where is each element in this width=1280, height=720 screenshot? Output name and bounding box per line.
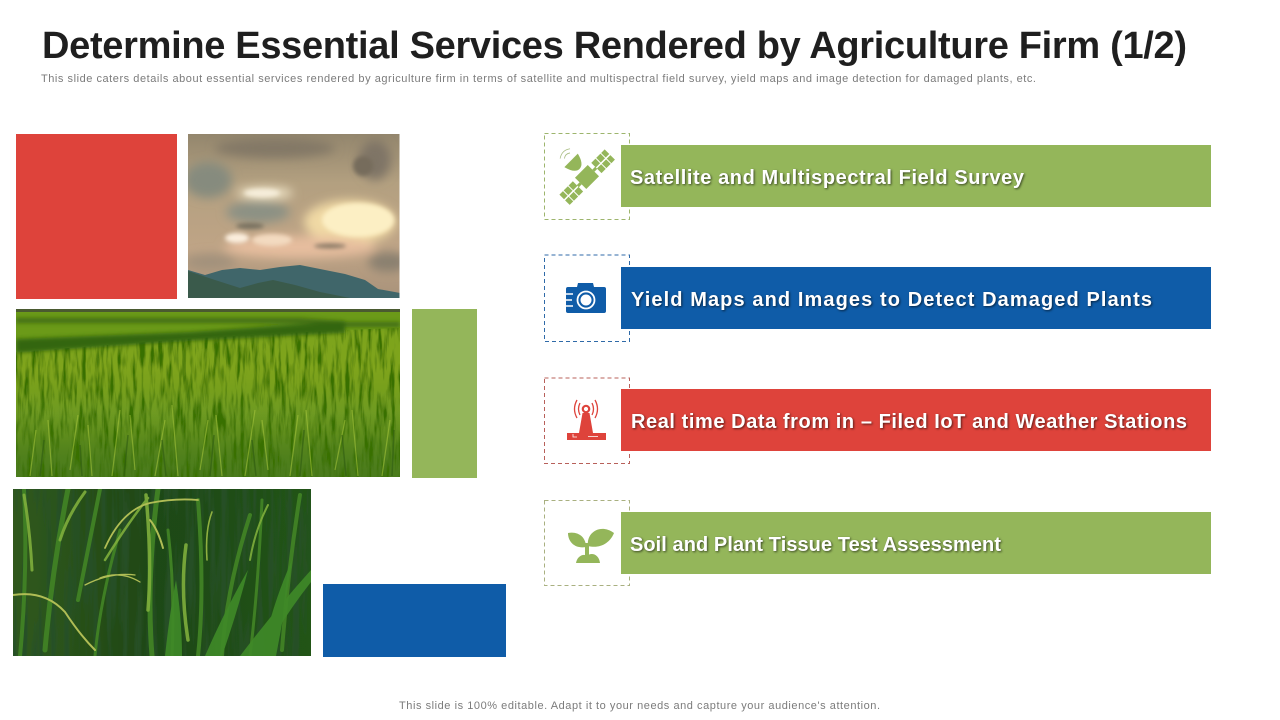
red tile xyxy=(16,134,177,299)
icon frame: sprout xyxy=(544,500,630,586)
green tile xyxy=(412,309,477,478)
photo: sunset sky over mountains xyxy=(184,134,408,298)
title: Determine Essential Services Rendered by Agriculture Firm (1/2) xyxy=(42,25,1187,67)
service row 2: yield maps xyxy=(544,255,1211,342)
label: soil and plant test: Soil and Plant Tissue Test Assessment xyxy=(630,534,1001,556)
icon: satellite xyxy=(540,130,615,205)
bar: real time data xyxy=(621,389,1211,451)
blue tile xyxy=(323,584,506,657)
icon: sprout xyxy=(568,529,614,563)
label: real time data: Real time Data from in – Filed IoT and Weather Stations xyxy=(631,411,1187,433)
service row 1: satellite survey xyxy=(540,130,1211,220)
icon frame: camera xyxy=(544,255,630,342)
label: yield maps: Yield Maps and Images to Detect Damaged Plants xyxy=(631,289,1152,311)
photo: rice close-up xyxy=(13,489,311,656)
label: satellite survey: Satellite and Multispectral Field Survey xyxy=(630,167,1025,189)
subtitle description: This slide caters details about essential services rendered by agriculture firm in terms of satellite and multispectral field survey, yield maps and image detection for damaged plants, etc. xyxy=(41,73,1036,85)
icon frame: satellite xyxy=(544,134,630,220)
icon frame: antenna xyxy=(544,378,630,464)
footer note: This slide is 100% editable. Adapt it to your needs and capture your audience's attention. xyxy=(399,700,880,712)
bar: yield maps xyxy=(621,267,1211,329)
service row 4: soil and plant test xyxy=(544,500,1211,586)
bar: satellite survey xyxy=(621,145,1211,207)
icon: antenna xyxy=(567,400,606,440)
bar: soil and plant test xyxy=(621,512,1211,574)
icon: camera xyxy=(566,283,606,313)
photo: rice field xyxy=(16,309,400,477)
service row 3: real time data xyxy=(544,378,1211,464)
